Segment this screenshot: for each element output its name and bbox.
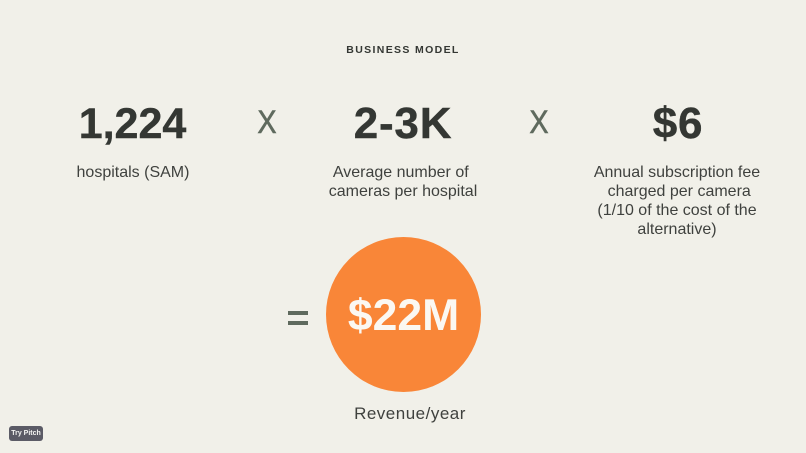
operator: equals [288,311,308,325]
operator: multiply: X [529,104,549,140]
metric: fee: $6 [653,99,703,148]
label: cameras: Average number of [333,164,469,181]
label: cameras [329,164,477,200]
label: fee: charged per camera [608,183,751,200]
badge: Try Pitch [9,426,43,441]
label: revenue: Revenue/year [354,404,466,423]
badge: Try Pitch: Try Pitch [11,430,41,437]
label: fee: Annual subscription fee [594,164,760,181]
label: fee: (1/10 of the cost of the [597,202,757,219]
label: cameras: cameras per hospital [329,183,477,200]
label: hospitals: hospitals (SAM) [77,164,189,181]
label: fee [594,164,760,238]
result circle [326,237,481,392]
metric: cameras: 2-3K [354,99,452,148]
operator: multiply: X [257,104,277,140]
label: fee: alternative) [637,221,717,238]
result value: $22M [348,291,459,340]
title: BUSINESS MODEL [346,44,460,56]
metric: hospitals: 1,224 [79,100,186,148]
